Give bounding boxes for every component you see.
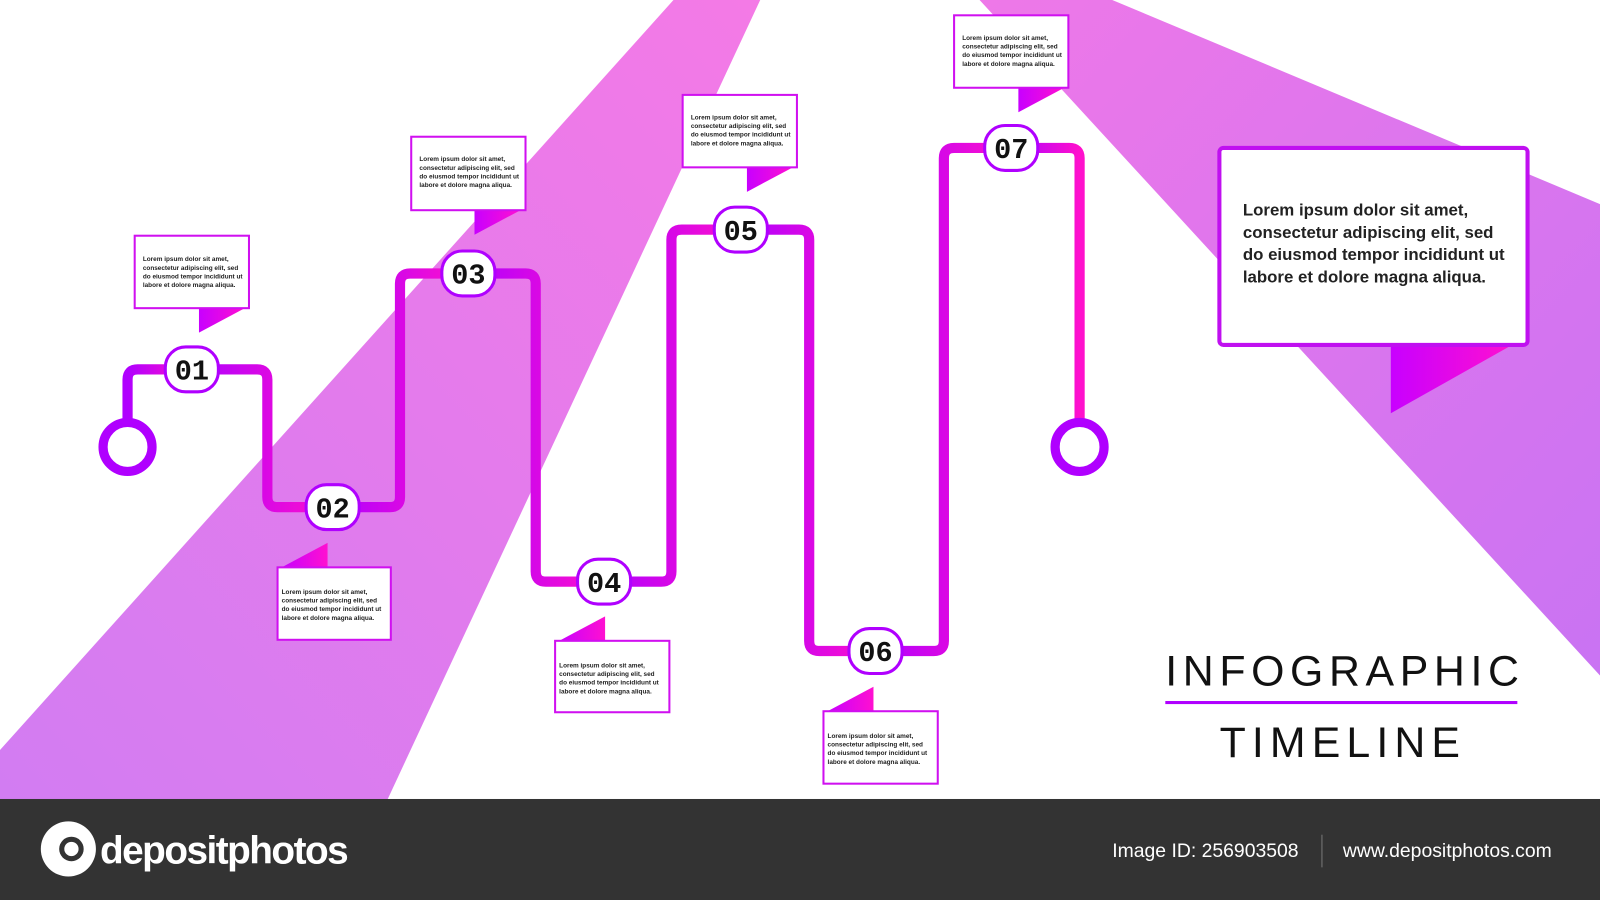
box 3: do eiusmod tempor incididunt ut [419,174,520,181]
box 5 [683,95,797,192]
box 6 [823,687,938,784]
badges: 07 [994,134,1028,167]
box 7: do eiusmod tempor incididunt ut [962,52,1063,59]
box 6: consectetur adipiscing elit, sed [828,741,923,748]
box 3: Lorem ipsum dolor sit amet, [419,156,505,163]
badges: 03 [451,260,486,293]
box 5: Lorem ipsum dolor sit amet, [691,114,777,121]
start circle [103,422,152,471]
box 5: do eiusmod tempor incididunt ut [691,132,791,139]
box 5: consectetur adipiscing elit, sed [691,123,786,130]
box 7 [954,15,1068,112]
box 1: consectetur adipiscing elit, sed [143,265,238,272]
badges: 02 [316,493,350,526]
footer [0,799,1600,900]
box 7: consectetur adipiscing elit, sed [962,43,1058,50]
box 6: labore et dolore magna aliqua. [828,759,920,766]
box 1: Lorem ipsum dolor sit amet, [143,256,229,263]
box 7: Lorem ipsum dolor sit amet, [962,35,1048,42]
box 6: do eiusmod tempor incididunt ut [828,750,928,757]
end circle [1055,422,1104,471]
box 2: do eiusmod tempor incididunt ut [282,606,382,613]
box 2: consectetur adipiscing elit, sed [282,598,377,605]
box 3 [411,137,526,235]
box 4: consectetur adipiscing elit, sed [559,671,655,678]
big text box [1219,148,1528,413]
box 2: labore et dolore magna aliqua. [282,615,374,622]
box 3: consectetur adipiscing elit, sed [419,165,515,172]
title: TIMELINE [1220,719,1466,767]
timeline path [128,148,1080,651]
background band right [980,0,1600,676]
box 4: do eiusmod tempor incididunt ut [559,680,660,687]
box 6: Lorem ipsum dolor sit amet, [828,733,914,740]
background band left [0,0,760,799]
small text boxes [135,15,1068,784]
badges: 06 [858,637,893,670]
footer: www.depositphotos.com [1342,840,1552,862]
badges: 04 [587,568,621,601]
box 5: labore et dolore magna aliqua. [691,140,784,147]
icon: camera logo [41,821,96,877]
box 1 [135,236,249,333]
box 2: Lorem ipsum dolor sit amet, [282,589,368,596]
box 4: Lorem ipsum dolor sit amet, [559,662,645,669]
big text box: Lorem ipsum dolor sit amet, [1243,200,1468,219]
big text box: labore et dolore magna aliqua. [1243,268,1486,287]
box 4 [555,616,669,712]
box 1: do eiusmod tempor incididunt ut [143,274,243,281]
badges: 05 [724,216,758,249]
box 3: labore et dolore magna aliqua. [419,182,512,189]
footer: Image ID: 256903508 [1112,840,1299,862]
title [1165,648,1525,767]
box 7: labore et dolore magna aliqua. [962,61,1055,68]
title: INFOGRAPHIC [1165,648,1525,696]
badges [165,126,1038,673]
box 2 [278,543,391,640]
big text box: consectetur adipiscing elit, sed [1243,223,1493,242]
box 1: labore et dolore magna aliqua. [143,282,236,289]
footer: depositphotos [100,829,347,872]
badges: 01 [175,356,209,389]
box 4: labore et dolore magna aliqua. [559,688,652,695]
big text box: do eiusmod tempor incididunt ut [1243,245,1505,264]
